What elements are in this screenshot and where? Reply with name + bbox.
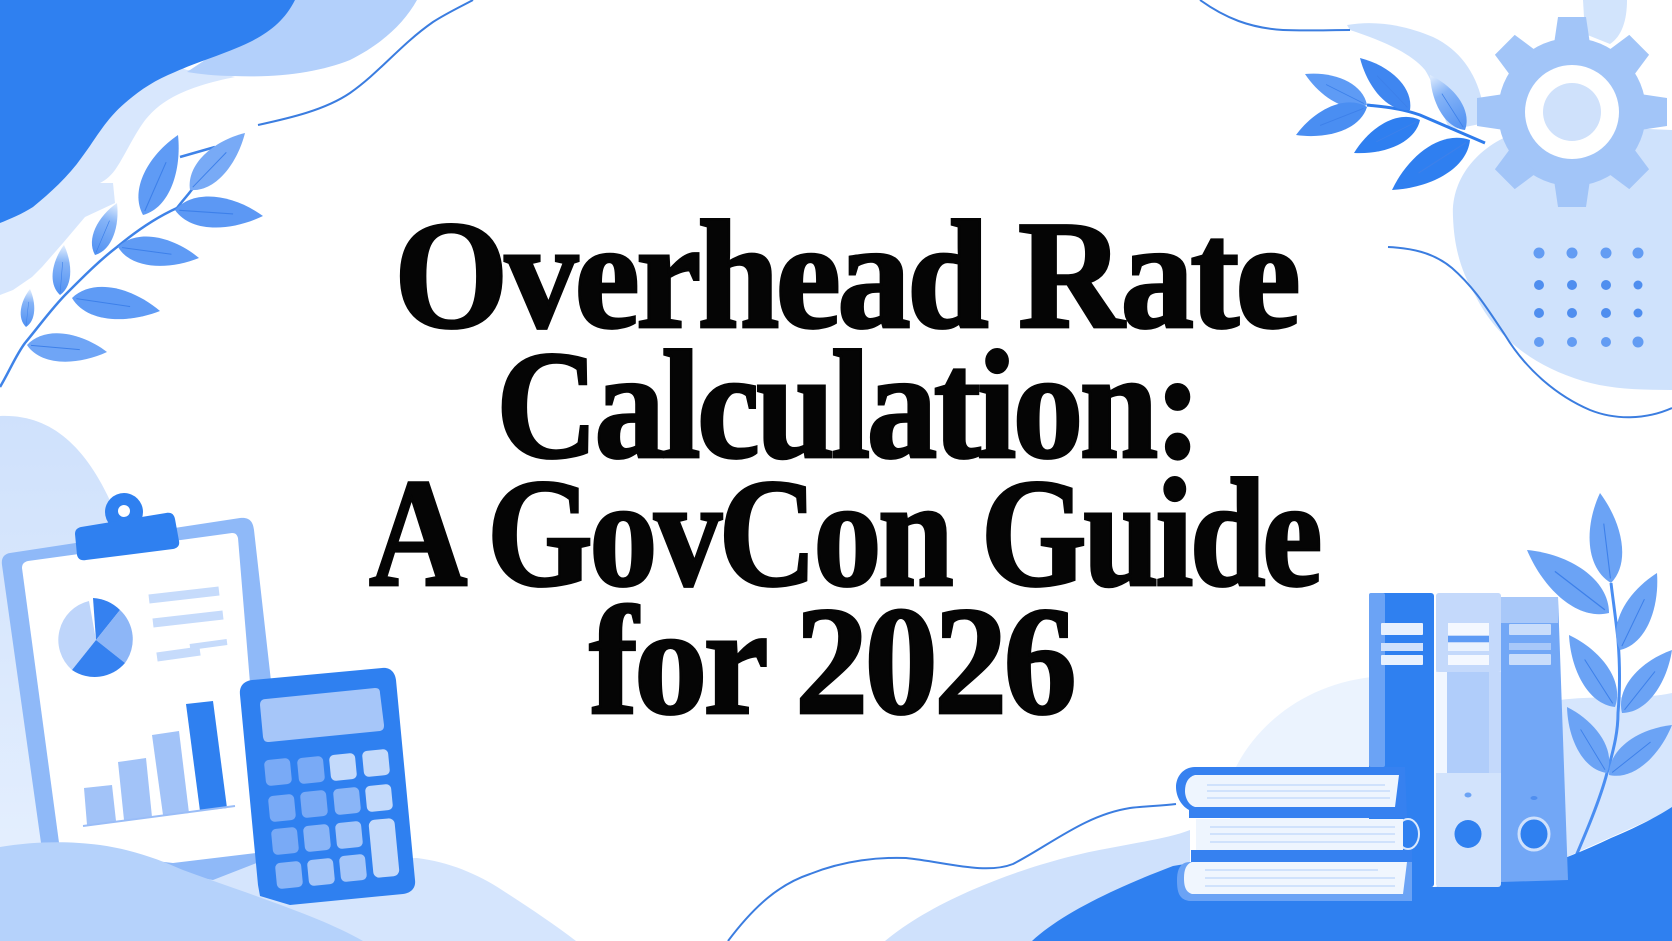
- clipboard clip: [75, 493, 179, 560]
- bottom-right pale hill: [1230, 677, 1372, 860]
- icon: calculator: [240, 668, 415, 905]
- book 2: [1191, 819, 1419, 862]
- bottom centre pale wave: [885, 830, 1190, 941]
- icon: clipboard with charts: [2, 493, 290, 880]
- title: Calculation:: [496, 319, 1198, 491]
- book 1: [1176, 767, 1407, 818]
- bottom-right dark wave: [1032, 807, 1672, 941]
- book 3: [1177, 862, 1412, 901]
- binders: [1369, 593, 1568, 887]
- stack of books: [1176, 767, 1419, 901]
- calculator keys: [264, 749, 400, 889]
- calculator screen: [260, 688, 384, 742]
- top-left blue waves: [0, 0, 417, 295]
- text placeholder lines: [149, 591, 227, 657]
- binder 2: [1436, 593, 1501, 887]
- top-left wavy line: [258, 0, 473, 125]
- pie chart: [58, 598, 133, 677]
- bar chart: [83, 701, 235, 826]
- bottom-right plant: [1516, 491, 1672, 863]
- binder 1: [1369, 593, 1434, 887]
- top-right pale band: [1347, 23, 1500, 130]
- top-right pale circle: [1453, 125, 1672, 390]
- top-right wavy lines: [1200, 0, 1672, 417]
- title: Overhead Rate: [394, 189, 1297, 361]
- top-right leaf branch: [1291, 49, 1485, 203]
- title: A GovCon Guide: [369, 447, 1319, 619]
- icon: gear: [1477, 0, 1667, 207]
- bottom-left front hill: [0, 842, 363, 941]
- binder 3: [1501, 597, 1568, 882]
- dot grid: [1534, 248, 1644, 348]
- bottom-left second hill: [173, 858, 576, 941]
- bottom-left pale blob: [0, 416, 112, 900]
- bottom wavy line: [728, 804, 1176, 941]
- top-left leaf branch: [0, 123, 264, 387]
- title: [369, 189, 1319, 747]
- bottom-right pale right hill: [1560, 693, 1672, 860]
- title: for 2026: [589, 575, 1073, 747]
